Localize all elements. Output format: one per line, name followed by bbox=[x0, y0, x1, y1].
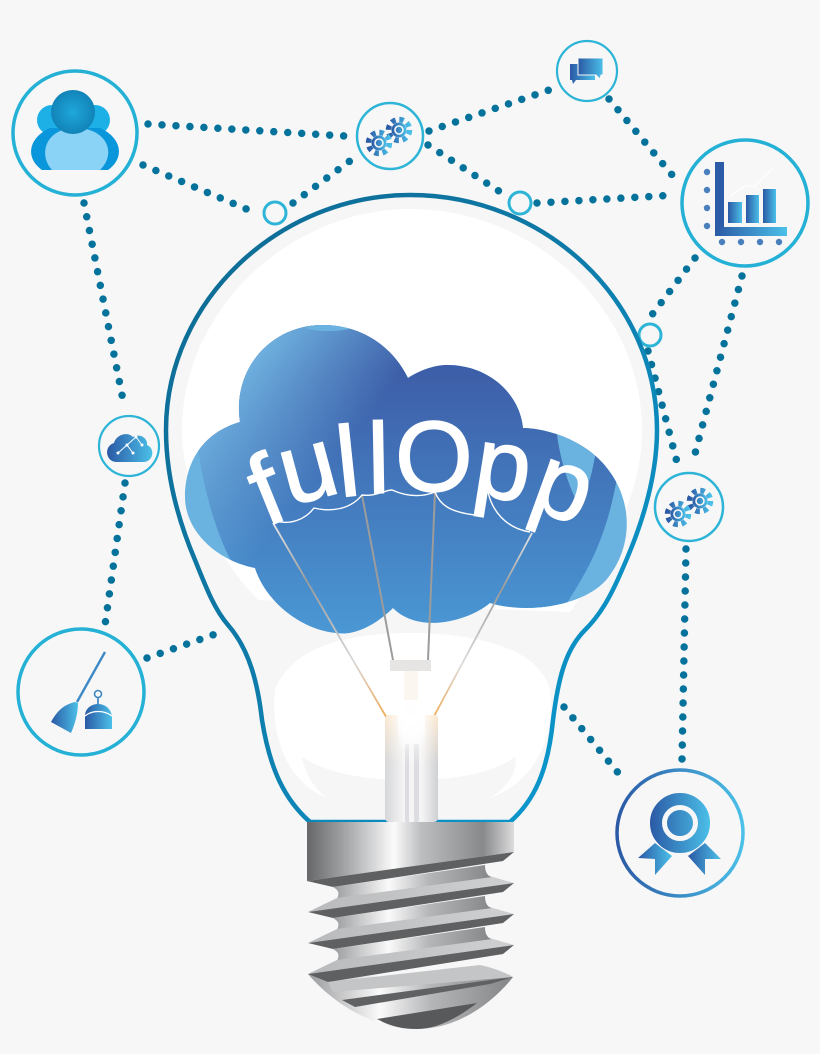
light bulb glass bbox=[166, 195, 657, 822]
icon: chat bubbles bbox=[557, 41, 617, 101]
icon: broom and dustpan bbox=[18, 629, 144, 755]
screw base bbox=[307, 822, 514, 1029]
icon: bar chart bbox=[682, 140, 808, 266]
icon: gears right bbox=[655, 473, 723, 541]
small node circles bbox=[264, 192, 661, 346]
icon: users bbox=[13, 71, 137, 195]
brand wordmark: fullOpp bbox=[232, 401, 610, 547]
filament wires bbox=[273, 490, 532, 720]
cloud logo bbox=[184, 325, 627, 634]
filament stem and glow bbox=[385, 660, 438, 822]
icon: gears top bbox=[357, 103, 423, 169]
icon: award ribbon bbox=[617, 770, 743, 896]
icon: cloud network bbox=[99, 416, 159, 476]
dotted network connectors bbox=[84, 88, 742, 780]
